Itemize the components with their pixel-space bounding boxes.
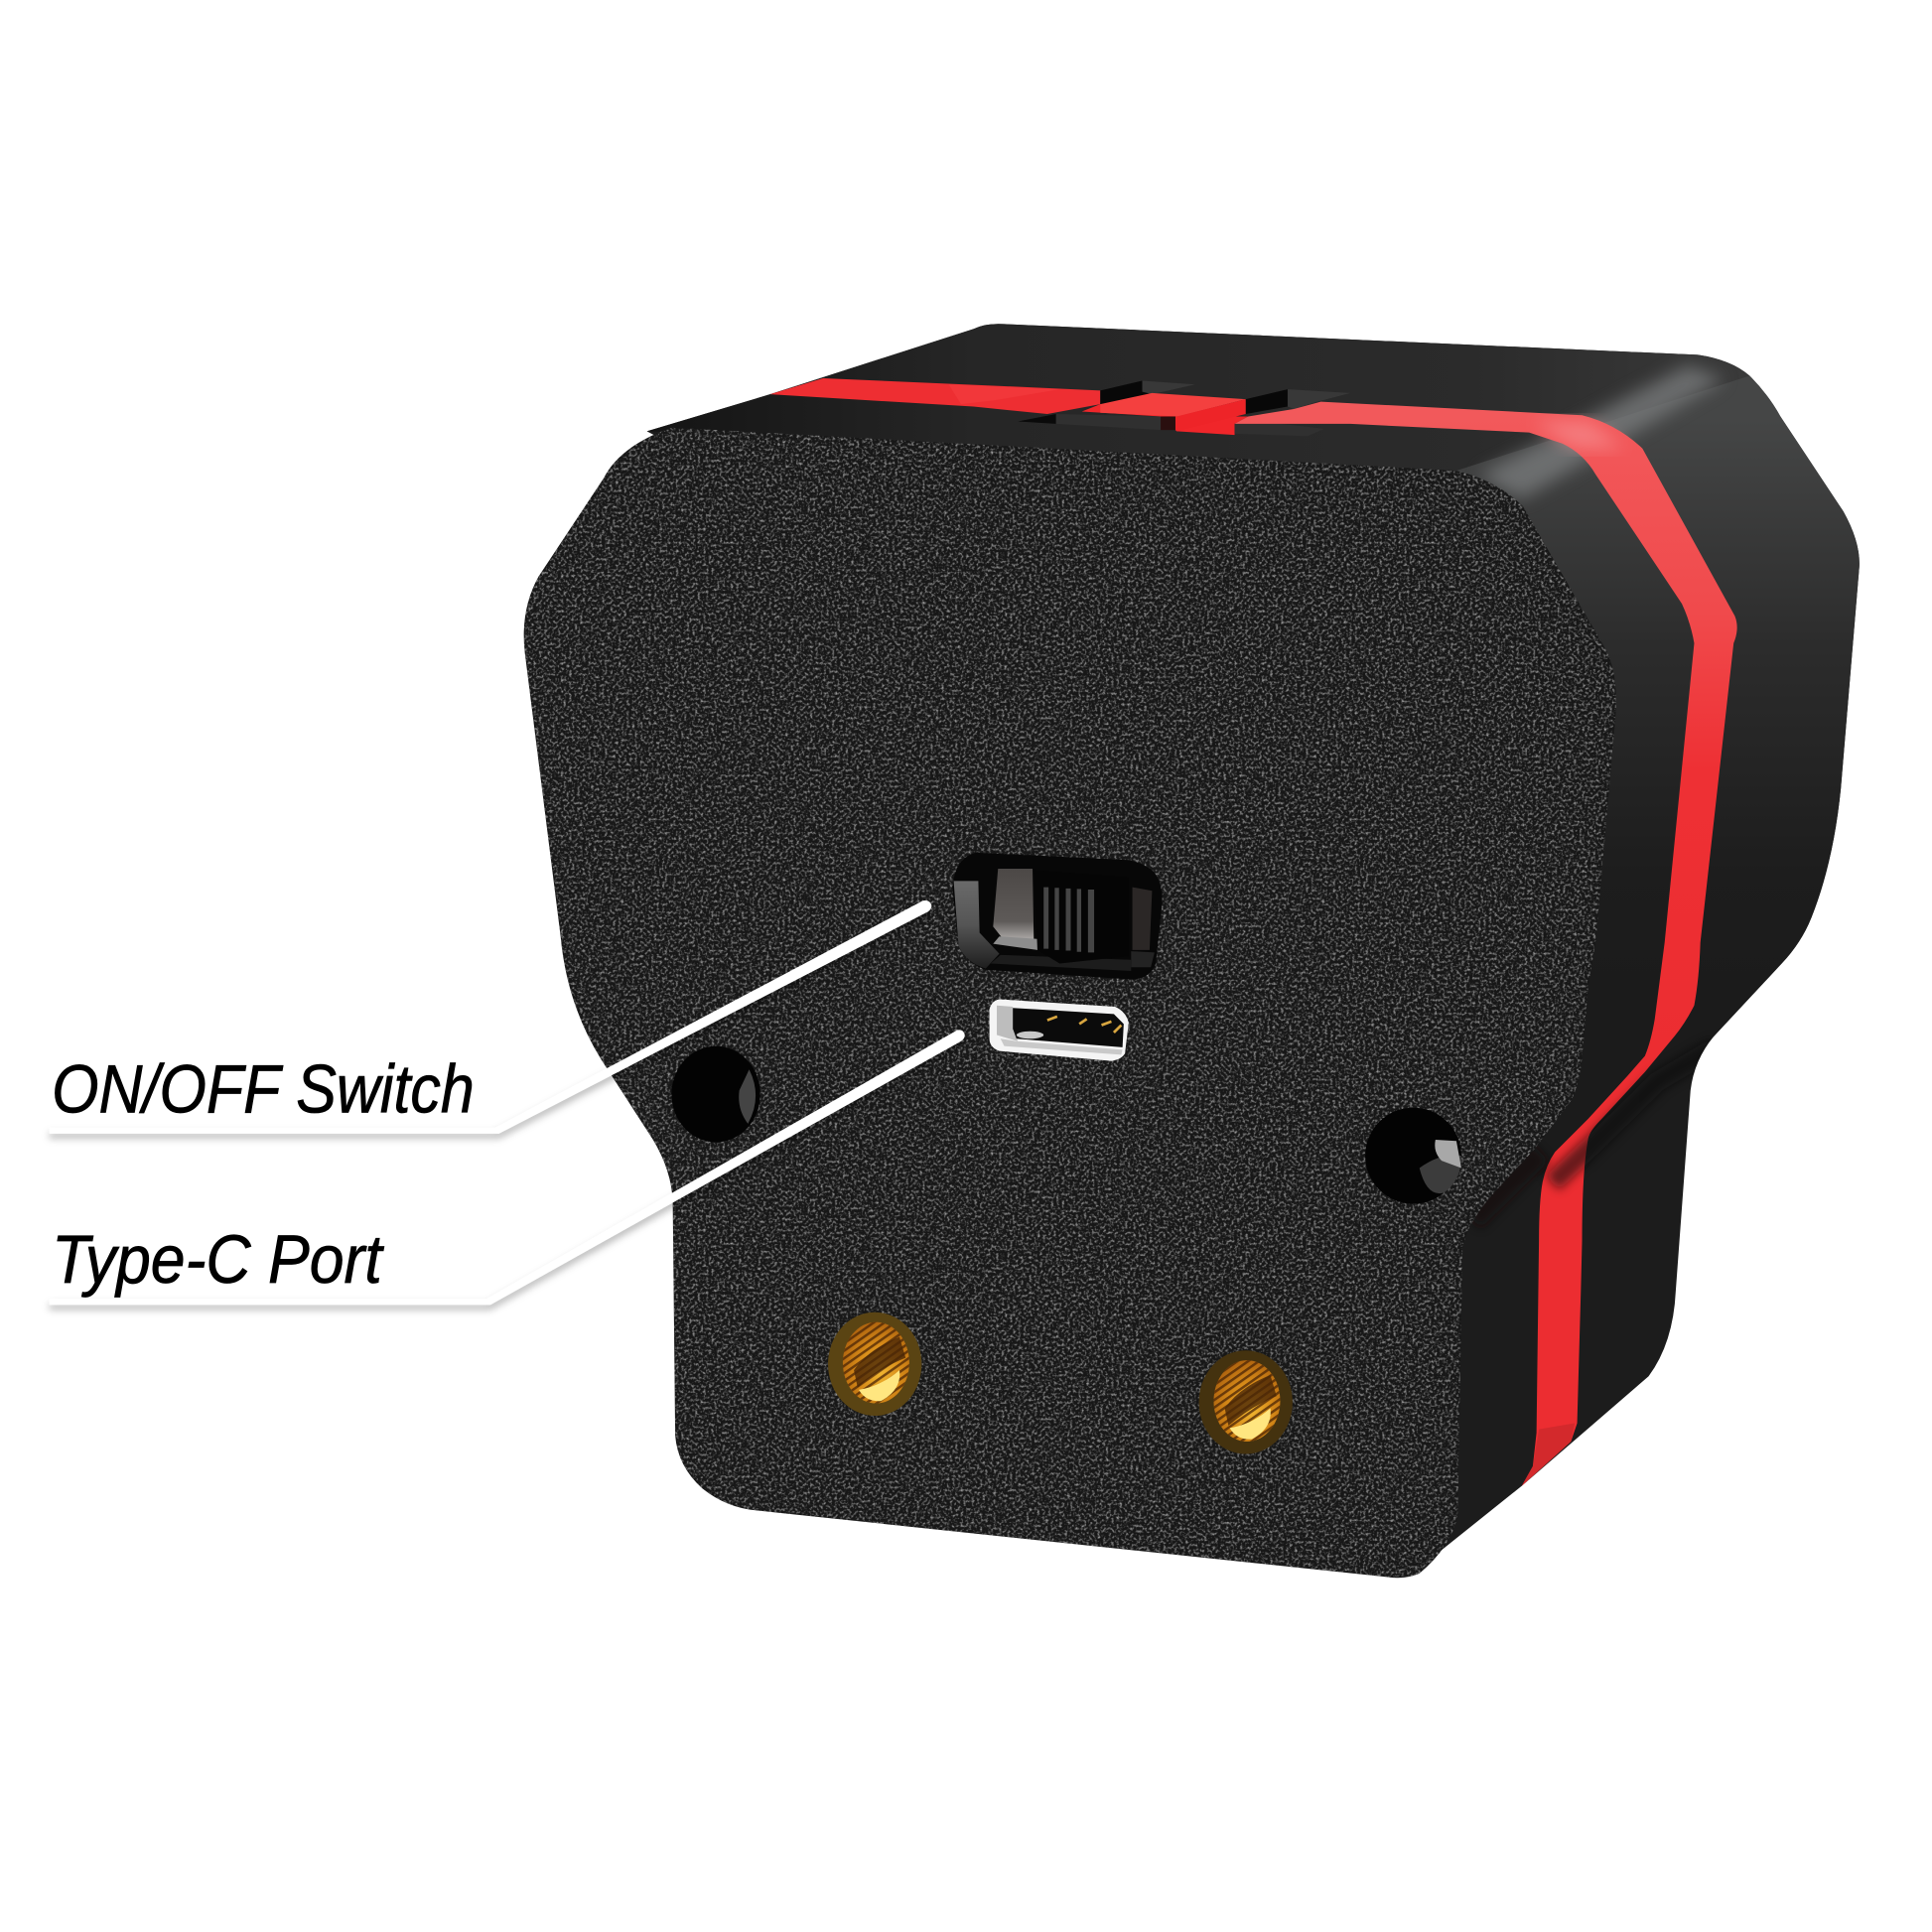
grey recess 4 bbox=[1235, 420, 1324, 436]
product diagram bbox=[46, 324, 1860, 1579]
upper side face bbox=[1456, 376, 1860, 1197]
red band bottom shade bbox=[1522, 1423, 1575, 1486]
gold pins bbox=[1047, 1017, 1121, 1033]
right lip bbox=[1131, 951, 1155, 967]
slider track bbox=[993, 869, 1034, 939]
right mounting hole with screw bbox=[1365, 1108, 1461, 1204]
label: Type-C Port: Type-C Port bbox=[52, 1222, 385, 1298]
label: ON/OFF Switch: ON/OFF Switch bbox=[52, 1052, 475, 1128]
callout: ON/OFF switch leader bbox=[50, 900, 931, 1134]
grey recess 2 bbox=[1288, 389, 1350, 409]
red band: top left bbox=[770, 378, 1100, 414]
body crease shadow bbox=[1472, 1047, 1716, 1220]
black recess 2 bbox=[1246, 389, 1288, 414]
left block highlight bbox=[949, 384, 1059, 404]
black wedge bbox=[1018, 414, 1056, 424]
grey recess 3 bbox=[1056, 414, 1161, 430]
device body bbox=[647, 324, 1860, 1574]
port inner shell bbox=[1001, 1038, 1123, 1054]
port opening bbox=[1013, 1008, 1124, 1047]
track lower lip bbox=[993, 936, 1037, 950]
switch recess bbox=[952, 853, 1163, 980]
top surface bbox=[647, 324, 1749, 506]
slider knob bbox=[1034, 870, 1129, 964]
black recess 1 bbox=[1100, 380, 1152, 404]
brass insert left bbox=[828, 1312, 921, 1416]
port inner wall bbox=[997, 1006, 1018, 1041]
tongue highlight bbox=[1017, 1032, 1043, 1038]
red lower strip bbox=[1082, 404, 1248, 435]
red band: right side bbox=[1235, 402, 1737, 1486]
textured back plate bbox=[524, 428, 1616, 1578]
dark red cube bbox=[1161, 416, 1175, 430]
Type-C port bbox=[990, 1000, 1129, 1061]
grey recess 1 bbox=[1142, 380, 1195, 394]
band highlight bbox=[1534, 421, 1624, 449]
top notches bbox=[949, 380, 1350, 436]
left mounting hole bbox=[671, 1046, 760, 1142]
corner highlight bbox=[1478, 364, 1725, 499]
red centre block bbox=[1100, 393, 1246, 416]
callout: Type-C port leader bbox=[50, 1030, 965, 1305]
red centre side bbox=[1176, 399, 1246, 431]
port housing bbox=[990, 1000, 1129, 1061]
left wall bbox=[954, 881, 1000, 968]
brass insert right bbox=[1199, 1350, 1293, 1453]
ON/OFF switch bbox=[952, 853, 1163, 980]
right wall bbox=[1133, 888, 1152, 950]
bottom lip bbox=[991, 955, 1131, 971]
